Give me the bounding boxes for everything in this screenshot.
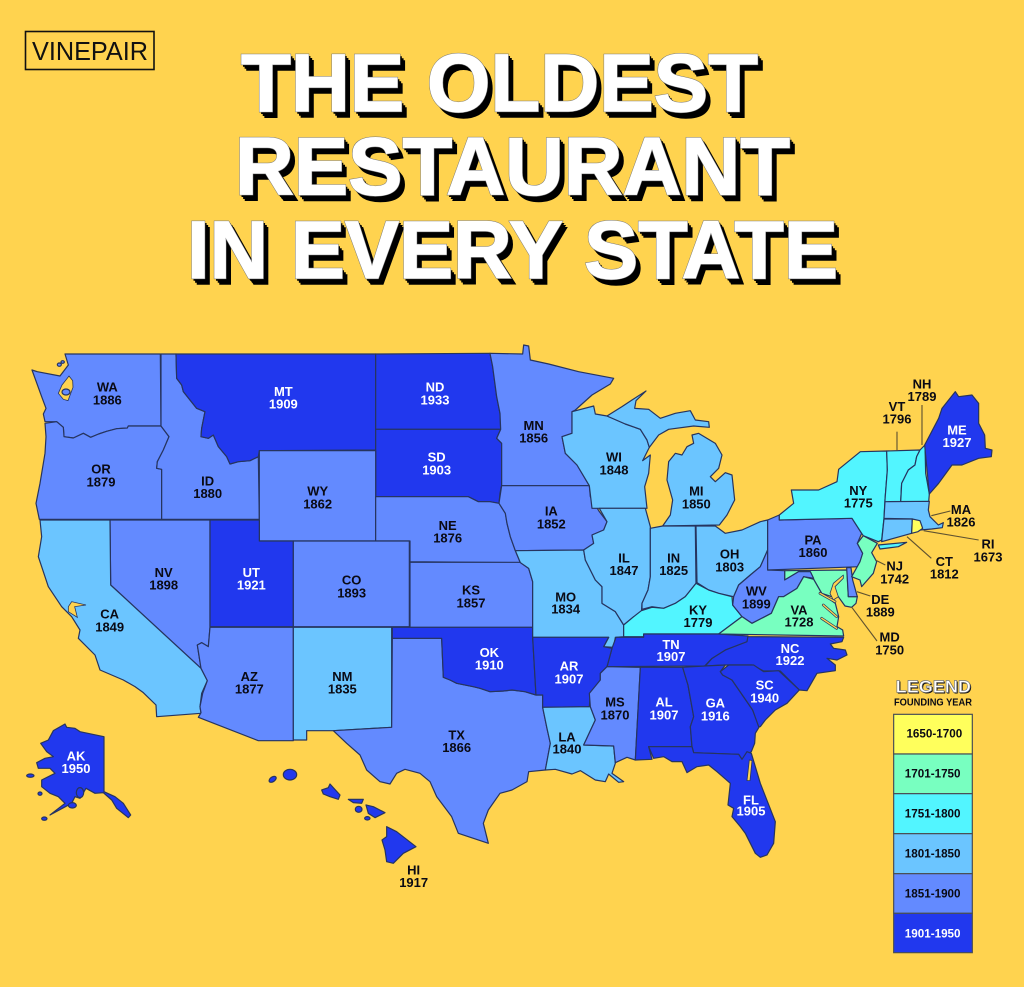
title bbox=[187, 38, 843, 302]
state: Wyoming: 1862 bbox=[303, 496, 332, 511]
state: Arizona bbox=[197, 627, 293, 741]
state: Maine: ME bbox=[947, 422, 967, 437]
state: South Carolina bbox=[720, 665, 799, 727]
state: West Virginia bbox=[733, 550, 814, 623]
title: RESTAURANT bbox=[235, 122, 790, 212]
state: Nebraska: NE bbox=[439, 518, 457, 533]
state: Minnesota bbox=[490, 345, 614, 486]
state: Wyoming bbox=[259, 451, 376, 541]
state: Illinois: 1847 bbox=[610, 563, 638, 578]
state: Washington: 1886 bbox=[93, 392, 122, 407]
state: Arkansas bbox=[533, 637, 612, 707]
state: Idaho bbox=[157, 354, 259, 519]
state: Oregon bbox=[36, 422, 169, 519]
state: South Carolina: SC bbox=[756, 678, 774, 693]
state: Kentucky: 1779 bbox=[684, 615, 712, 630]
callout: Vermont: VT bbox=[889, 399, 905, 414]
state: New Mexico bbox=[293, 627, 392, 740]
state: Iowa: IA bbox=[545, 504, 558, 519]
state: North Dakota bbox=[376, 353, 501, 429]
state: Massachusetts bbox=[884, 501, 943, 530]
central and eastern states bbox=[490, 345, 1002, 953]
state: Texas bbox=[333, 638, 550, 843]
state: Louisiana bbox=[543, 707, 624, 782]
state: Indiana: 1825 bbox=[659, 563, 688, 578]
legend swatch 1901-1950: 1901-1950 bbox=[905, 927, 961, 940]
state: Iowa bbox=[499, 486, 607, 551]
callout: Rhode Island: 1673 bbox=[974, 549, 1002, 564]
state: Tennessee: TN bbox=[662, 637, 680, 652]
callout: Massachusetts: 1826 bbox=[947, 515, 975, 530]
state: Indiana: IN bbox=[667, 550, 680, 565]
state: Delaware bbox=[847, 568, 857, 597]
state: Illinois: IL bbox=[618, 550, 630, 565]
legend swatch 1851-1900 bbox=[894, 874, 972, 913]
state: Oregon: 1879 bbox=[87, 474, 115, 489]
state: Alabama bbox=[635, 667, 694, 760]
state: Wyoming: WY bbox=[307, 484, 328, 499]
state: Indiana bbox=[642, 526, 696, 609]
state: Minnesota: 1856 bbox=[519, 431, 548, 446]
state: Florida: 1905 bbox=[737, 804, 765, 819]
state: Montana: MT bbox=[274, 384, 293, 399]
legend swatch 1701-1750: 1701-1750 bbox=[905, 768, 961, 781]
legend heading: LEGEND bbox=[896, 677, 971, 697]
state: Wisconsin: WI bbox=[606, 450, 622, 465]
state: Alabama: AL bbox=[655, 695, 673, 710]
state: Montana bbox=[176, 354, 376, 464]
state: North Carolina: 1922 bbox=[776, 653, 804, 668]
callout: Delaware: DE bbox=[871, 592, 890, 607]
state: Montana: 1909 bbox=[269, 397, 298, 412]
callout: Connecticut: CT bbox=[936, 554, 953, 569]
state: Utah: 1921 bbox=[237, 578, 266, 593]
state: Missouri bbox=[515, 550, 624, 647]
state: Hawaii: HI bbox=[407, 862, 420, 877]
title: IN EVERY STATE bbox=[192, 211, 843, 302]
state: New York bbox=[779, 451, 907, 549]
callout: Rhode Island: RI bbox=[981, 537, 994, 552]
state: West Virginia: 1899 bbox=[742, 596, 771, 611]
state: Nevada: 1898 bbox=[149, 578, 178, 593]
state: Hawaii bbox=[268, 769, 428, 890]
legend heading: LEGEND bbox=[897, 678, 972, 698]
state: Nebraska: 1876 bbox=[433, 531, 462, 546]
title: THE OLDEST bbox=[244, 42, 761, 133]
legend swatch 1801-1850 bbox=[894, 834, 972, 874]
state: North Carolina: NC bbox=[781, 641, 800, 656]
state: Michigan bbox=[607, 391, 735, 526]
callout: New Hampshire: NH bbox=[913, 376, 931, 391]
state: Alabama: 1907 bbox=[650, 707, 678, 722]
state: Iowa: 1852 bbox=[537, 516, 566, 531]
callout: Connecticut bbox=[907, 537, 959, 582]
state: Utah: UT bbox=[243, 565, 260, 580]
state: New Jersey bbox=[852, 536, 877, 587]
state: Colorado: CO bbox=[342, 573, 361, 588]
map of the United States bbox=[27, 345, 1002, 953]
state: New York: 1775 bbox=[844, 496, 873, 511]
state: New Hampshire bbox=[901, 445, 929, 503]
state: South Dakota bbox=[376, 429, 502, 503]
state: Minnesota: MN bbox=[524, 418, 544, 433]
state: Oklahoma: 1910 bbox=[475, 658, 504, 673]
logo: VinePair: VINEPAIR bbox=[32, 36, 148, 66]
state: Nebraska bbox=[376, 497, 520, 563]
state: Kansas: KS bbox=[462, 583, 480, 598]
state: Wisconsin: 1848 bbox=[600, 462, 628, 477]
state: Virginia bbox=[719, 577, 844, 636]
title: THE OLDEST bbox=[241, 38, 758, 129]
state: Oklahoma: OK bbox=[480, 645, 500, 660]
legend swatch 1650-1700 bbox=[894, 714, 972, 754]
title: THE OLDEST bbox=[246, 44, 763, 135]
state: Michigan: MI bbox=[689, 484, 704, 499]
state: Virginia: 1728 bbox=[785, 614, 813, 629]
legend swatch 1650-1700: 1650-1700 bbox=[906, 728, 962, 741]
callout: New Jersey: NJ bbox=[886, 559, 903, 574]
state: Georgia: 1916 bbox=[701, 708, 730, 723]
state: Idaho: ID bbox=[201, 473, 214, 488]
callout: Delaware: 1889 bbox=[866, 605, 895, 620]
title: RESTAURANT bbox=[240, 128, 795, 218]
callout: Connecticut: 1812 bbox=[930, 567, 959, 582]
callout: Vermont bbox=[883, 399, 911, 451]
callout: New Jersey: 1742 bbox=[880, 571, 909, 586]
state: Arkansas: 1907 bbox=[555, 671, 583, 686]
title: RESTAURANT bbox=[235, 122, 790, 212]
state: Kansas: 1857 bbox=[457, 595, 485, 610]
state: Virginia: VA bbox=[790, 602, 808, 617]
legend bbox=[894, 677, 972, 953]
state: Tennessee: 1907 bbox=[657, 649, 685, 664]
state: Alaska bbox=[27, 724, 131, 820]
state: Nevada bbox=[110, 520, 210, 668]
state: Alaska: 1950 bbox=[62, 761, 90, 776]
title: IN EVERY STATE bbox=[187, 205, 838, 296]
legend swatch 1901-1950 bbox=[894, 913, 972, 953]
state: Pennsylvania: 1860 bbox=[799, 545, 827, 560]
state: Arkansas: AR bbox=[560, 659, 579, 674]
state: Oklahoma bbox=[392, 627, 536, 695]
state: Georgia bbox=[683, 665, 759, 759]
state: Illinois bbox=[584, 508, 650, 625]
state: Mississippi: 1870 bbox=[601, 707, 629, 722]
state: New Mexico: 1835 bbox=[328, 682, 357, 697]
state: Florida: FL bbox=[743, 792, 759, 807]
state: Georgia: GA bbox=[706, 696, 726, 711]
state: Arizona: AZ bbox=[241, 669, 258, 684]
callout: Maryland bbox=[851, 607, 904, 657]
callout: New Hampshire: 1789 bbox=[908, 389, 936, 404]
callout: New Jersey bbox=[875, 559, 909, 586]
callout: Massachusetts bbox=[931, 502, 975, 530]
callout: Vermont: 1796 bbox=[883, 412, 911, 427]
callout: Delaware bbox=[857, 592, 895, 620]
callout: Massachusetts: MA bbox=[951, 502, 972, 517]
state: Ohio: OH bbox=[720, 547, 739, 562]
state: Tennessee bbox=[607, 634, 748, 667]
state: Florida bbox=[649, 747, 775, 857]
state: South Carolina: 1940 bbox=[750, 690, 779, 705]
title: IN EVERY STATE bbox=[189, 207, 840, 298]
title: IN EVERY STATE bbox=[190, 209, 841, 300]
legend swatch 1851-1900: 1851-1900 bbox=[905, 887, 961, 900]
state: South Dakota: SD bbox=[428, 450, 446, 465]
state: Louisiana: 1840 bbox=[553, 742, 581, 757]
title: THE OLDEST bbox=[241, 38, 758, 129]
legend swatch 1751-1800 bbox=[894, 794, 972, 834]
state: California bbox=[38, 520, 207, 717]
state: Colorado: 1893 bbox=[337, 585, 366, 600]
legend subheading: FOUNDING YEAR bbox=[894, 698, 972, 709]
state: New York: NY bbox=[849, 483, 868, 498]
title: RESTAURANT bbox=[238, 126, 793, 216]
state: Oregon: OR bbox=[91, 462, 111, 477]
title: RESTAURANT bbox=[237, 124, 792, 214]
state: California: CA bbox=[100, 607, 120, 622]
state: West Virginia: WV bbox=[746, 584, 767, 599]
state: California: 1849 bbox=[95, 619, 124, 634]
state: Rhode Island bbox=[912, 519, 923, 533]
state: Wisconsin bbox=[562, 406, 650, 508]
state: Pennsylvania: PA bbox=[804, 532, 822, 547]
state: Connecticut bbox=[882, 519, 912, 542]
state: Maine: 1927 bbox=[943, 435, 971, 450]
title: IN EVERY STATE bbox=[187, 205, 838, 296]
state: Ohio bbox=[696, 520, 768, 597]
state: Utah bbox=[210, 520, 293, 627]
state: Arizona: 1877 bbox=[235, 682, 264, 697]
state: Ohio: 1803 bbox=[715, 559, 744, 574]
state: Missouri: MO bbox=[555, 590, 576, 605]
state: Louisiana: LA bbox=[558, 730, 576, 745]
state: Mississippi: MS bbox=[605, 695, 625, 710]
callout: New Hampshire bbox=[908, 376, 936, 445]
state: Missouri: 1834 bbox=[551, 602, 581, 617]
state: Pennsylvania bbox=[768, 515, 863, 570]
callout: Rhode Island bbox=[924, 531, 1002, 564]
state: Texas: TX bbox=[448, 727, 465, 742]
state: Washington bbox=[32, 354, 161, 438]
state: Kansas bbox=[410, 562, 533, 627]
state: Washington: WA bbox=[97, 380, 118, 395]
state: Michigan: 1850 bbox=[682, 496, 711, 511]
state: North Carolina bbox=[705, 637, 847, 691]
legend swatch 1751-1800: 1751-1800 bbox=[905, 807, 961, 820]
state: Alaska: AK bbox=[67, 748, 86, 763]
state: New Mexico: NM bbox=[332, 669, 352, 684]
state: North Dakota: 1933 bbox=[421, 392, 449, 407]
Chesapeake Bay and Virginia inlets bbox=[820, 575, 843, 628]
callout: Maryland: MD bbox=[880, 630, 900, 645]
state: Texas: 1866 bbox=[442, 740, 471, 755]
legend swatch 1801-1850: 1801-1850 bbox=[905, 847, 961, 860]
state: Colorado bbox=[293, 541, 409, 627]
state: Maine bbox=[925, 392, 992, 494]
state: Idaho: 1880 bbox=[193, 486, 222, 501]
state: Vermont bbox=[885, 450, 920, 502]
state: Kentucky: KY bbox=[689, 602, 707, 617]
state: Nevada: NV bbox=[155, 565, 173, 580]
state: Kentucky bbox=[624, 583, 742, 637]
title: THE OLDEST bbox=[243, 40, 760, 131]
state: North Dakota: ND bbox=[426, 380, 444, 395]
state: Maryland bbox=[785, 570, 857, 607]
legend swatch 1701-1750 bbox=[894, 754, 972, 794]
callout: Maryland: 1750 bbox=[875, 642, 904, 657]
state: South Dakota: 1903 bbox=[422, 462, 451, 477]
state: Mississippi bbox=[584, 667, 640, 763]
state: Hawaii: 1917 bbox=[399, 875, 428, 890]
